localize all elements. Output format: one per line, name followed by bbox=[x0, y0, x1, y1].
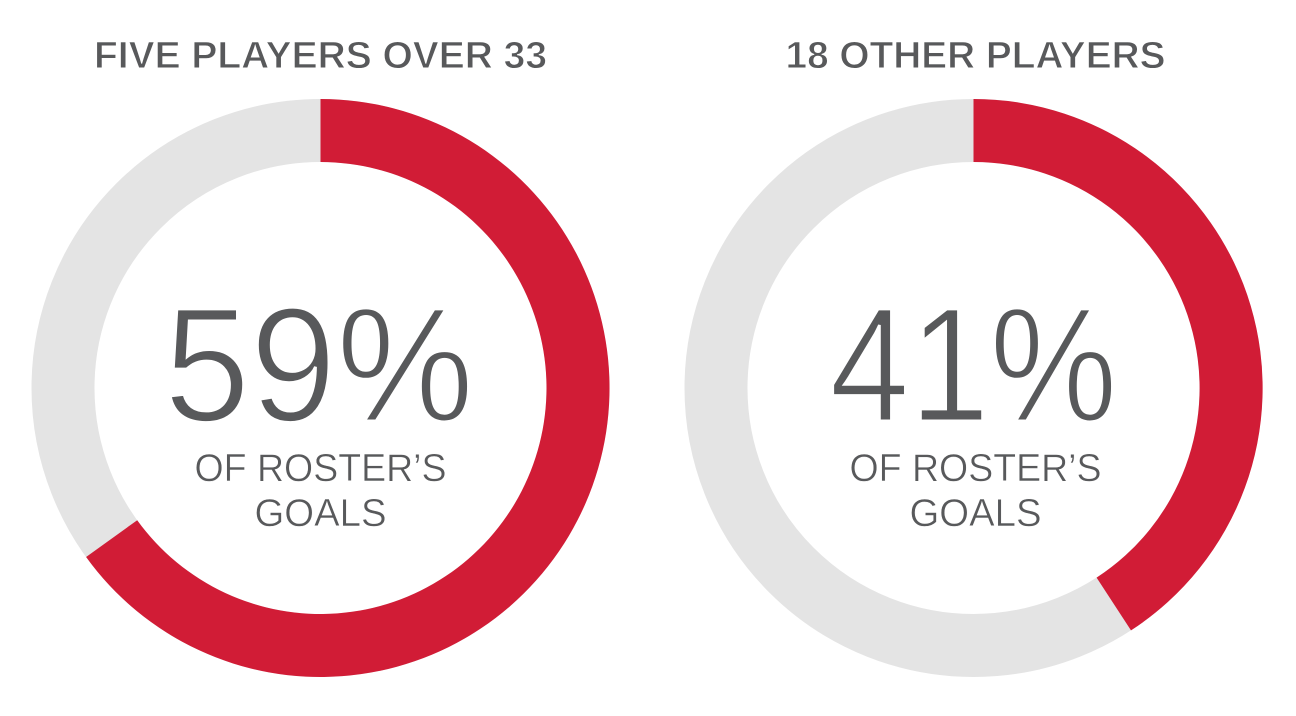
caption: of roster's goals bbox=[194, 447, 446, 535]
caption: of roster's goals bbox=[850, 447, 1102, 535]
panel: 18 other players bbox=[716, 35, 1263, 646]
panel: five players over 33 bbox=[63, 35, 610, 677]
value: 41%: 41% bbox=[830, 273, 1118, 456]
heading: five players over 33: FIVE PLAYERS OVER 33 bbox=[94, 35, 547, 77]
caption: of roster's goals: OF ROSTER’S bbox=[850, 447, 1102, 490]
donut chart: 59 percent bbox=[63, 99, 610, 677]
heading: 18 other players: 18 OTHER PLAYERS bbox=[786, 35, 1166, 77]
donut chart: 41 percent bbox=[716, 99, 1263, 645]
caption: of roster's goals: GOALS bbox=[910, 492, 1042, 535]
caption: of roster's goals: GOALS bbox=[254, 492, 386, 535]
value: 59%: 59% bbox=[164, 273, 474, 456]
caption: of roster's goals: OF ROSTER’S bbox=[194, 447, 446, 490]
